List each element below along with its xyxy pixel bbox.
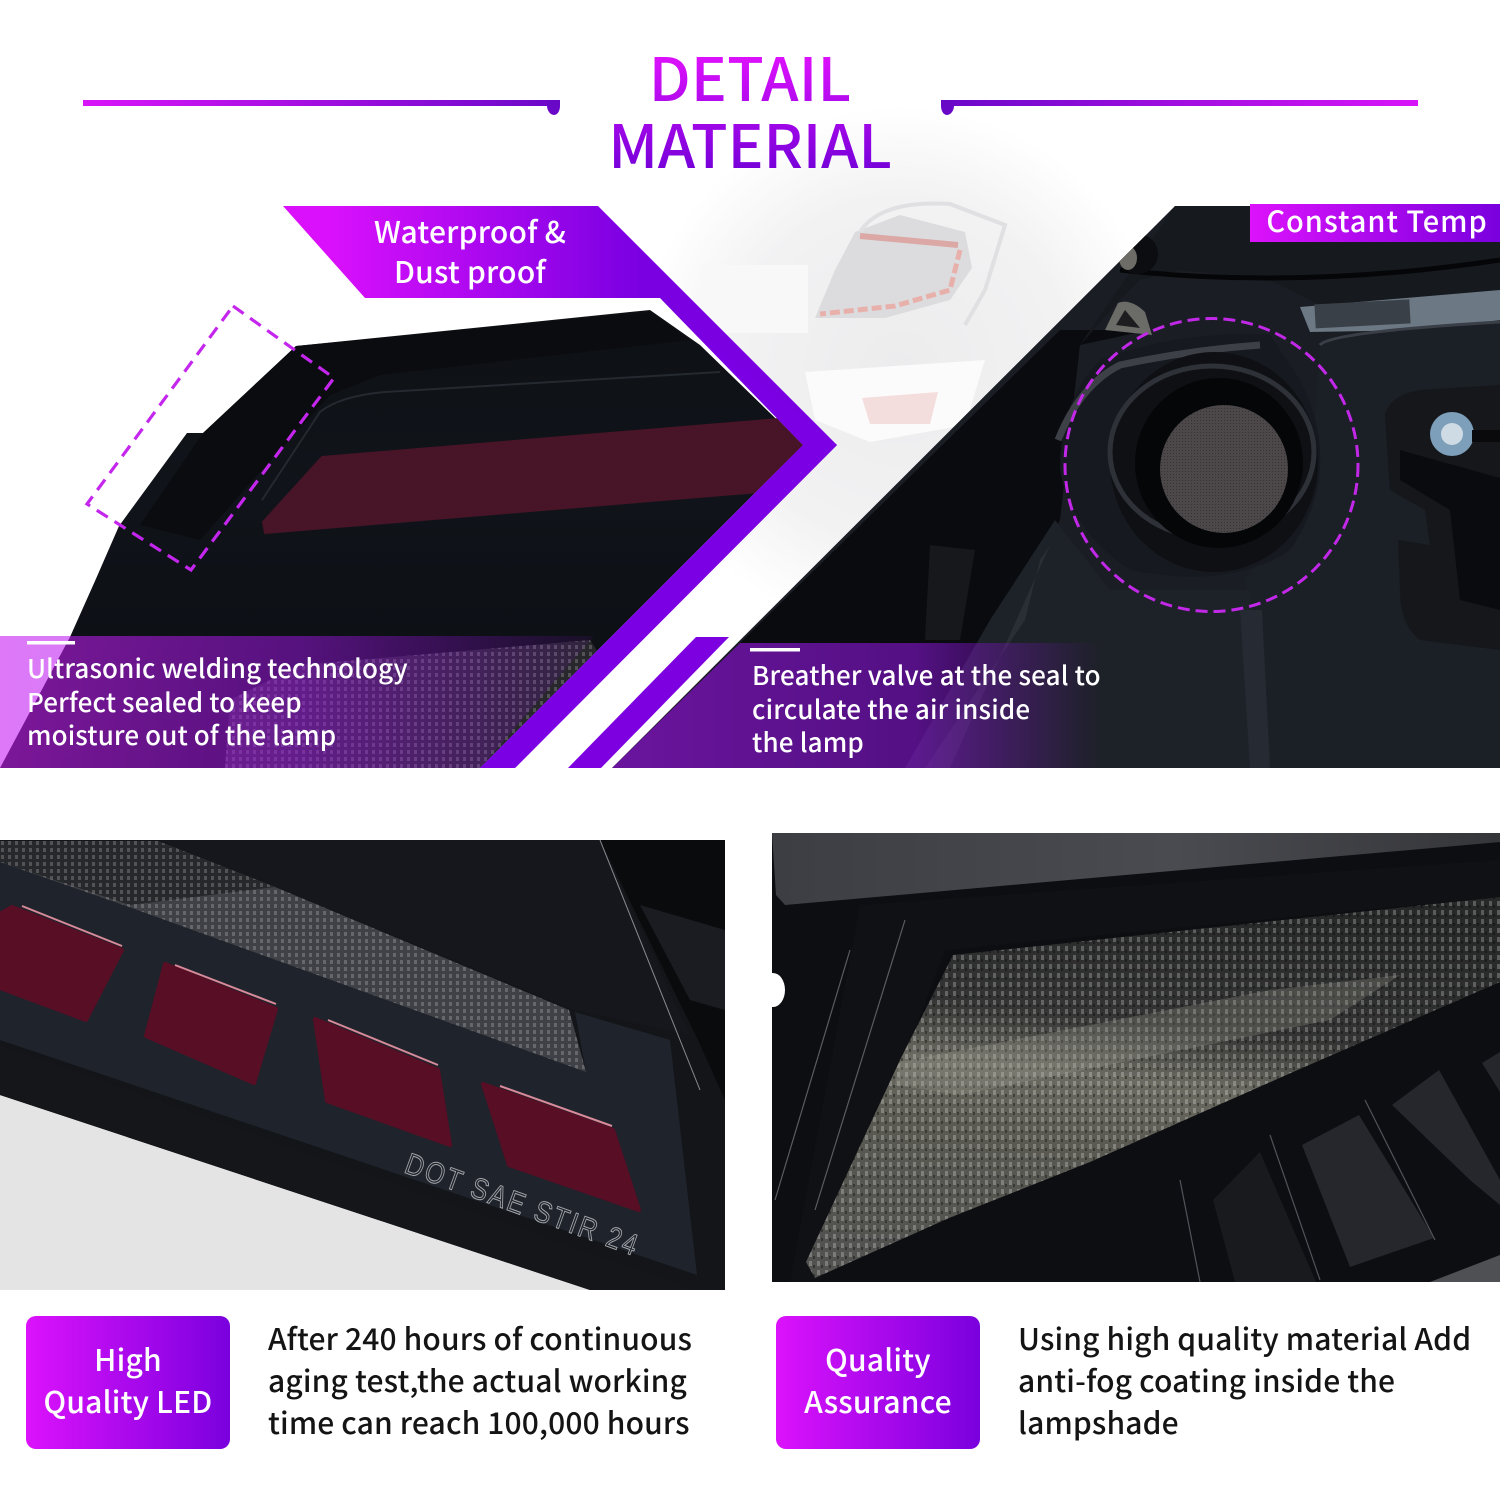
mounting hole (772, 973, 785, 1007)
grey top band (772, 833, 1500, 905)
description: LED aging test: After 240 hours of continuous (268, 1315, 692, 1359)
description: Ultrasonic welding technology (27, 649, 408, 686)
bolts (1120, 236, 1158, 270)
ribbon text: Dust proof (394, 248, 547, 292)
label sticker (1300, 290, 1500, 332)
dark segments (1213, 1052, 1500, 1282)
description: material and coating: Using high quality material Add (1018, 1315, 1471, 1359)
title (608, 32, 892, 186)
callout: quality assurance: Quality (825, 1336, 931, 1380)
description: circulate the air inside (752, 690, 1030, 727)
title line: MATERIAL: MATERIAL (608, 99, 892, 186)
DOT SAE marking: DOT SAE STIR 24 (401, 1147, 645, 1263)
right overlay text (750, 648, 1101, 760)
grey backdrop (0, 1095, 590, 1290)
lower lens (225, 640, 600, 768)
dashed circle (1065, 318, 1358, 612)
callout: high quality LED (26, 1316, 230, 1449)
constant temp tag: Constant Temp (1266, 199, 1488, 241)
left text overlay band (0, 636, 594, 768)
lens strip (0, 841, 586, 1072)
lens (806, 897, 1500, 1278)
mesh valve (1160, 405, 1288, 533)
bracket (1385, 385, 1500, 650)
left overlay text (27, 641, 408, 753)
upper dark housing (158, 840, 690, 1035)
callout: high quality LED: Quality LED (44, 1378, 212, 1422)
panel: lower right lens photo (761, 833, 1500, 1282)
red lights (0, 907, 639, 1210)
callout: quality assurance (776, 1316, 980, 1449)
red light bar (263, 417, 803, 533)
panel: lower left lamp photo (0, 840, 725, 1290)
description: material and coating: lampshade (1018, 1399, 1179, 1443)
body panel (1404, 326, 1458, 330)
rim (790, 860, 1500, 1282)
lower ribs (907, 520, 1058, 765)
purple accent stripe (568, 637, 729, 768)
description: LED aging test: time can reach 100,000 hours (268, 1399, 690, 1443)
purple chevron frame with waterproof ribbon (283, 206, 837, 768)
panel: breather valve photo (600, 200, 1500, 770)
accent bar (27, 641, 75, 644)
description: material and coating: anti-fog coating inside the (1018, 1357, 1395, 1401)
black lower frame (0, 1095, 590, 1290)
right header rule (941, 100, 1418, 115)
faded car background photo (723, 164, 1088, 558)
smoked body (0, 862, 697, 1275)
description: Perfect sealed to keep (27, 683, 302, 720)
shadow area (612, 330, 1150, 768)
grommet (1060, 399, 1074, 486)
panel: waterproof lamp photo (0, 310, 803, 768)
left header rule (83, 100, 560, 115)
callout: quality assurance: Assurance (804, 1378, 952, 1422)
callout: high quality LED: High (94, 1336, 162, 1380)
ribbon text (374, 208, 566, 292)
description: Breather valve at the seal to (752, 656, 1101, 693)
ribbon text: Waterproof & (374, 208, 566, 252)
description: LED aging test: aging test,the actual working (268, 1357, 687, 1401)
title line: DETAIL: DETAIL (649, 32, 851, 119)
description: the lamp (752, 723, 864, 760)
description: moisture out of the lamp (27, 716, 336, 753)
screw (1430, 412, 1474, 456)
lamp body (0, 310, 803, 768)
dashed highlight box (87, 306, 334, 570)
accent bar (750, 648, 800, 652)
right text overlay band (612, 643, 1100, 768)
